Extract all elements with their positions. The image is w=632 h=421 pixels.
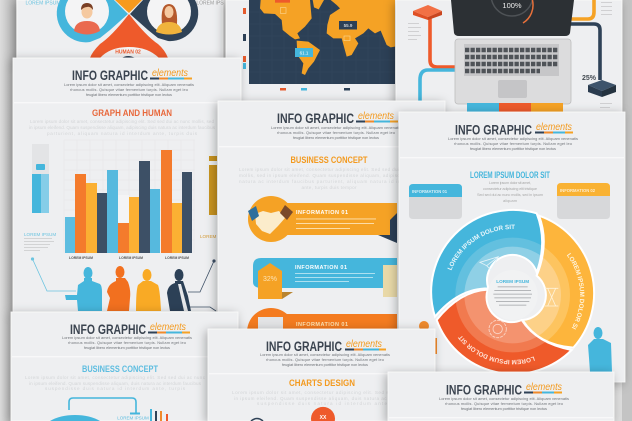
red box [413,5,442,20]
section text: Lorem ipsum dolor sit amet, consectetur adipiscing elit. Sed sed dui ac nunc [25,375,206,380]
label: lorem ipsum right: LOREM IPS [196,0,224,6]
section text: parturient, aliquam natura id interdum ante, turpis duis [47,131,198,136]
panel: world map [226,0,397,101]
section text: in ipsum eleifend. Quam suspendisse aliquam, duis natura ac interdum faucibus [29,381,202,386]
section text [29,119,216,136]
label: 25%: 25% [582,75,597,82]
icon: handshake [248,205,293,234]
panel: business concept blue [11,312,238,421]
curved labels [448,224,584,364]
section text: consectetur adipiscing elit tristique [483,186,537,191]
ribbon: information 01 orange: INFORMATION 01 [296,210,348,216]
section text [239,167,420,190]
intro text: rhoncus mollis. Quisque vitae fermentum turpis. Nullam eget leo [70,87,188,92]
intro text [271,125,401,140]
connector and dome [50,398,140,421]
intro text: feugiat libero elementum porttitor tristique non lectus [86,92,172,97]
intro text [260,352,390,367]
section text [25,375,206,391]
section text: Lorem ipsum dolor sit amet, consectetur adipiscing elit. Sed sed dui ac [232,390,413,395]
icon: paper plane [480,257,498,270]
callout: information 02: INFORMATION 02 [560,188,596,193]
divider [389,417,613,418]
ribbon: information 01 orange [248,196,397,243]
intro text: feugiat libero elementum porttitor tristique non lectus [282,362,368,367]
section text: natura ac interdum faucibus parturient, aliquam natura id interdum [239,179,419,184]
icon: dark dome [122,56,135,58]
section text: suspendisse duis natura id interdum ante [257,401,387,406]
section title: LOREM IPSUM DOLOR SIT [470,170,550,181]
map label: 61.1: 61.1 [300,50,309,56]
map background [249,0,395,84]
chart circles: XX [320,415,327,421]
centre text [488,270,538,320]
intro text: Lorem ipsum dolor sit amet, consectetur adipiscing elit. Aliquam venenatis [271,125,401,130]
map label: 55.9 [339,21,357,30]
touchpad [498,80,527,98]
curved labels: LOREM IPSUM DOLOR SIT [448,224,515,270]
divider [209,373,434,374]
section text: ante, turpis duis tempor [302,185,357,190]
icon: gear ring [489,320,506,338]
intro text [448,136,578,151]
intro text: Lorem ipsum dolor sit amet, consectetur adipiscing elit. Aliquam venenatis [62,335,192,340]
heading: info graphic: elements [150,322,186,333]
heading: info graphic: INFO GRAPHIC [266,339,342,354]
segment: yellow [522,214,595,348]
label: human 02: HUMAN 02 [115,50,141,56]
intro text [62,335,192,350]
intro text: rhoncus mollis. Quisque vitae fermentum turpis. Nullam eget leo [454,141,572,146]
divider [12,356,237,357]
icon: 32% tag: 32% [263,276,277,283]
coloured tabs [467,103,563,113]
intro text: feugiat libero elementum porttitor tristique non lectus [293,135,379,140]
callout: information 01: INFORMATION 01 [412,189,448,194]
icon: yellow top wedge [115,0,142,13]
map side markers [243,8,246,69]
section text: Lorem ipsum dolor sit amet, consectetur adipiscing elit. Sed sed dui ac nunc mollis, sed [30,119,214,124]
intro text: rhoncus mollis. Quisque vitae fermentum turpis. Nullam eget leo [68,340,186,345]
map label: 55.9: 55.9 [344,23,353,28]
intro text: feugiat libero elementum porttitor tristique non lectus [470,146,556,151]
section text: mollis, sed in ipsum eleifend. Quam suspendisse aliquam, adipiscing duis [239,173,420,178]
keyboard [464,44,559,76]
section text: suspendisse duis natura id interdum ante, turpis [45,386,186,391]
intro text [439,396,569,411]
section text: Lorem ipsum dolor sit amet, [489,180,531,185]
side progress bar [32,144,49,213]
ribbon: information 01 blue: INFORMATION 01 [295,265,347,271]
panel: business concept orange [218,101,445,356]
heading: info graphic: INFO GRAPHIC [455,122,532,138]
label: lorem ipsum: LOREM IPSUM [117,416,149,420]
chart circles [251,407,335,421]
axis labels: LOREM IPSUM [119,256,143,260]
axis labels [69,256,189,260]
icon: white ring inner [100,47,159,58]
icon: hourglass [545,288,558,306]
callout: information 01 [409,184,462,219]
orange edge marks [419,321,437,354]
axis labels: LOREM IPSUM [165,256,189,260]
intro text: Lorem ipsum dolor sit amet, consectetur adipiscing elit. Aliquam venenatis [439,396,569,401]
intro text: rhoncus mollis. Quisque vitae fermentum turpis. Nullam eget leo [445,401,563,406]
segment: blue [430,209,543,318]
callout: information 02 [557,183,610,219]
side notes [408,2,612,108]
screen ring [492,0,533,23]
section text [232,390,413,406]
heading: info graphic: INFO GRAPHIC [72,68,148,83]
heading: info graphic: elements [536,122,572,133]
section text: in ipsum eleifend. Quam suspendisse aliquam, adipiscing duis natura ac interdum faucibus [29,125,216,130]
mini bars [150,409,168,421]
axis labels: LOREM IPSUM [69,256,93,260]
heading: info graphic: elements [346,339,382,350]
intro text: Lorem ipsum dolor sit amet, consectetur adipiscing elit. Aliquam venenatis [448,136,578,141]
intro text: Lorem ipsum dolor sit amet, consectetur adipiscing elit. Aliquam venenatis [260,352,390,357]
people silhouettes [65,266,191,311]
section title: BUSINESS CONCEPT [290,155,368,166]
side note text [24,232,56,251]
section text: aliquam [503,198,517,203]
panel: charts design [208,329,435,421]
icon: blue man [588,327,612,372]
section text: Lorem ipsum dolor sit amet, consectetur adipiscing elit. Sed sed dui ac nunc [239,167,420,172]
section title: CHARTS DESIGN [289,378,355,389]
panel: human infographic [17,0,224,64]
divider [219,146,444,147]
tan block [383,265,397,297]
icon: blue person ring [57,0,128,42]
intro text [64,82,194,97]
segment: red [436,290,574,372]
dark box [588,80,616,97]
donut wheel chart [430,209,595,372]
heading: info graphic: elements [526,382,562,393]
laptop screen [451,0,574,36]
section title: BUSINESS CONCEPT [82,364,158,375]
heading: info graphic: elements [152,68,188,79]
laptop base [455,39,571,104]
panel: laptop infographic [396,0,622,114]
ribbon: information 01 orange bottom: INFORMATION 01 [296,322,348,328]
chart grid [64,140,195,253]
right progress bar: LOREM [200,234,217,239]
section text: in ipsum eleifend. Quam suspendisse aliquam, duis natura ac interdum [234,396,410,401]
heading: info graphic: INFO GRAPHIC [446,382,522,398]
heading: info graphic: INFO GRAPHIC [70,322,146,337]
map grid [249,0,395,84]
map bottom markers [280,88,350,90]
centre text: LOREM IPSUM [496,279,529,284]
divider [400,157,624,158]
section title: GRAPH AND HUMAN [92,108,172,119]
heading: info graphic: INFO GRAPHIC [277,111,354,126]
intro text: Lorem ipsum dolor sit amet, consectetur adipiscing elit. Aliquam venenatis [64,82,194,87]
intro text: rhoncus mollis. Quisque vitae fermentum turpis. Nullam eget leo [266,357,384,362]
label: lorem ipsum left: LOREM IPSUM [25,0,61,6]
screen ring: 100% [502,1,522,10]
section text: Sed sed dui ac nunc mollis, sed in ipsum [477,192,543,197]
panel: bottom right [388,372,614,421]
map continents [260,0,395,75]
intro text: feugiat libero elementum porttitor tristique non lectus [84,345,170,350]
icon: dark person ring [130,0,198,41]
heading: info graphic: elements [358,111,394,122]
side note text: LOREM IPSUM [24,232,56,237]
panel: graph and human [13,58,241,313]
ribbon: information 01 orange bottom [247,308,397,356]
section text [477,180,543,203]
intro text: feugiat libero elementum porttitor tristique non lectus [461,406,547,411]
curved labels: LOREM IPSUM DOLOR SIT [566,252,584,330]
bar chart [65,150,192,253]
connector lines [31,257,216,311]
connector lines [420,0,600,102]
divider [14,102,240,103]
icon: 32% tag [258,263,293,299]
right progress bar [200,156,217,239]
ribbon: information 01 blue [253,258,397,299]
map label: 61.1 [295,48,313,57]
panel: lorem ipsum wheel [390,108,628,390]
intro text: rhoncus mollis. Quisque vitae fermentum turpis. Nullam eget leo [277,130,395,135]
curved labels: LOREM IPSUM DOLOR SIT [458,336,535,364]
icon: orange teardrop [90,14,168,58]
